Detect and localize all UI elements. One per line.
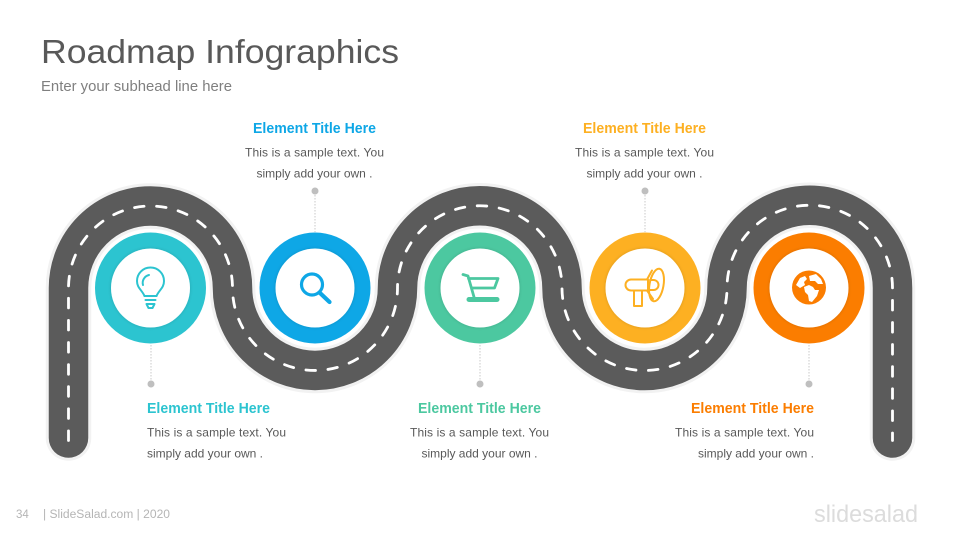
footer: 34 [16,509,29,521]
milestone: globe [754,232,864,344]
connector 4 [642,188,648,232]
text block 1: simply add your own . [147,446,263,460]
title: Roadmap Infographics [41,34,399,71]
text block 3 [410,401,549,460]
text block 2 [245,121,384,180]
text block 2: This is a sample text. You [245,146,384,160]
text block 1 [147,401,286,460]
icon: lightbulb [137,268,164,308]
logo: slidesalad [814,501,918,528]
milestone: cart [424,232,536,344]
text block 4: simply add your own . [586,166,702,180]
text block 4 [575,121,714,180]
connector 5 [806,345,812,388]
connector 2 [312,188,318,232]
text block 3: This is a sample text. You [410,426,549,440]
milestone: megaphone [590,232,700,344]
milestone: lightbulb [95,232,206,344]
text block 3: simply add your own . [422,446,538,460]
text block 5: Element Title Here [691,401,814,417]
winding road [68,205,892,440]
icon: globe [792,270,826,304]
text block 5: simply add your own . [698,446,814,460]
text block 4: Element Title Here [583,121,706,137]
text block 2: Element Title Here [253,121,376,137]
text block 2: simply add your own . [256,166,372,180]
subhead: Enter your subhead line here [41,79,232,95]
connector 1 [148,345,154,388]
text block 5: This is a sample text. You [675,426,814,440]
icon: cart [463,274,498,300]
text block 1: Element Title Here [147,401,270,417]
milestone: magnifier [260,232,370,344]
icon: magnifier [302,274,330,302]
text block 4: This is a sample text. You [575,146,714,160]
text block 3: Element Title Here [418,401,541,417]
text block 5 [675,401,814,460]
footer: | SlideSalad.com | 2020 [43,509,170,521]
connector 3 [476,345,484,388]
text block 1: This is a sample text. You [147,426,286,440]
icon: megaphone [626,268,666,306]
